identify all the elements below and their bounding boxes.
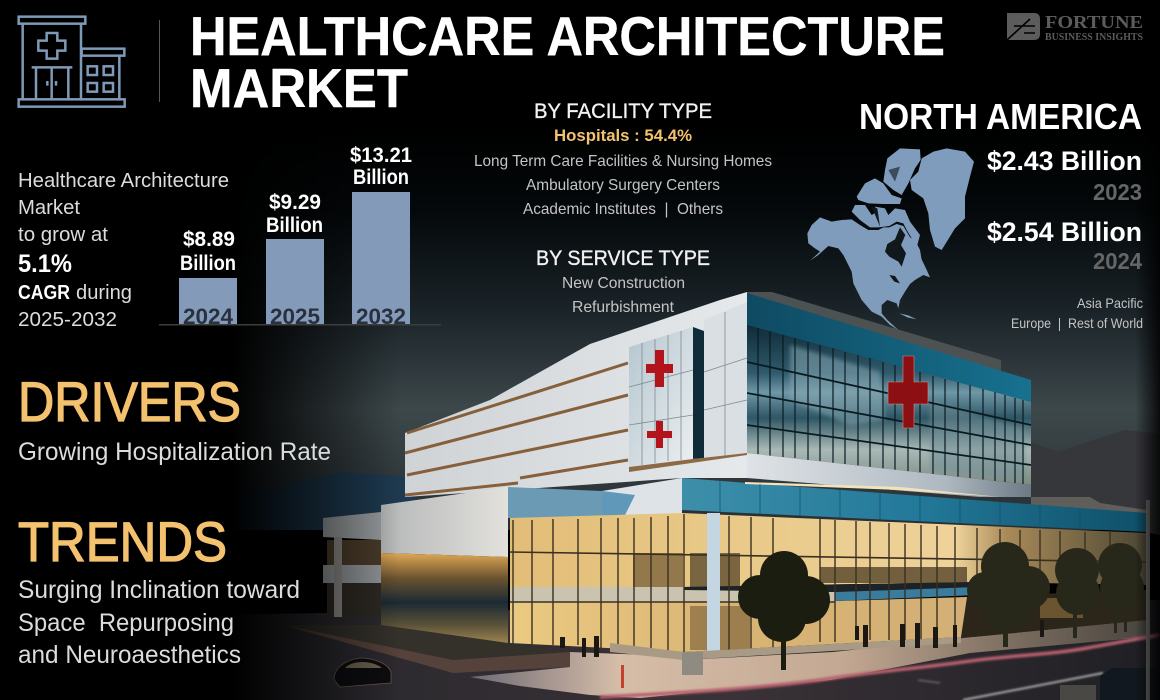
regional stats: Asia Pacific bbox=[1077, 295, 1143, 311]
left lower white box bbox=[381, 478, 682, 643]
bar 2032: 2032 bbox=[356, 304, 406, 329]
service type segment: New Construction bbox=[562, 275, 685, 292]
regional stats bbox=[859, 96, 1143, 331]
service type segment bbox=[536, 247, 710, 316]
dark soffit bbox=[684, 582, 980, 592]
bar 2024: $8.89 bbox=[183, 228, 235, 251]
bar 2025: $9.29 bbox=[269, 191, 321, 214]
regional stats: NORTH AMERICA bbox=[859, 96, 1142, 137]
bar 2025: 2025 bbox=[270, 304, 320, 329]
planter bbox=[283, 625, 570, 673]
road bbox=[200, 600, 1160, 700]
parked car bottom right bbox=[1060, 668, 1160, 700]
CAGR text block: Market bbox=[18, 197, 80, 219]
car bbox=[334, 658, 391, 687]
pavement bbox=[470, 620, 1147, 698]
CAGR text block bbox=[18, 170, 229, 331]
CAGR text block: to grow at bbox=[18, 224, 108, 246]
trends: TRENDS bbox=[18, 510, 227, 573]
bar 2032 bbox=[350, 144, 412, 329]
people on the pavement bbox=[560, 620, 1044, 657]
icon: small red crosses bbox=[646, 350, 673, 448]
storefront glazing bbox=[510, 513, 1147, 660]
divider bbox=[159, 20, 160, 102]
facility type segment: Hospitals : 54.4% bbox=[554, 127, 692, 145]
regional stats: 2024 bbox=[1093, 248, 1142, 274]
reflected clouds bbox=[790, 345, 885, 425]
title: MARKET bbox=[190, 57, 408, 119]
facility type segment: Long Term Care Facilities & Nursing Homes bbox=[474, 153, 772, 170]
CAGR text block: CAGR bbox=[18, 282, 70, 304]
regional stats: Europe | Rest of World bbox=[1011, 315, 1143, 331]
trends: and Neuroaesthetics bbox=[18, 641, 241, 669]
grey parapet beyond the band bbox=[1031, 497, 1147, 516]
trees bbox=[738, 542, 1144, 670]
title: HEALTHCARE ARCHITECTURE bbox=[190, 5, 945, 67]
Hudson Bay and Great Lakes cuts bbox=[872, 167, 906, 283]
upper glazing bbox=[747, 325, 1031, 485]
logo: Fortune Business Insights bbox=[1007, 12, 1143, 43]
trends bbox=[18, 510, 300, 669]
facility type segment: Academic Institutes | Others bbox=[523, 201, 723, 218]
street pole bbox=[1146, 500, 1150, 700]
service type segment: BY SERVICE TYPE bbox=[536, 247, 710, 270]
ground floor base bbox=[610, 637, 961, 660]
facility type segment: BY FACILITY TYPE bbox=[534, 100, 712, 123]
logo: Fortune Business Insights: BUSINESS INSIGHTS bbox=[1045, 32, 1143, 43]
bar 2025: Billion bbox=[266, 214, 323, 237]
light trails bbox=[600, 635, 1160, 700]
title bbox=[190, 5, 945, 119]
regional stats: $2.43 Billion bbox=[987, 146, 1142, 176]
trends: Space Repurposing bbox=[18, 609, 234, 637]
brown floor stripes bbox=[405, 363, 628, 495]
upper white floors bbox=[405, 292, 747, 497]
bar 2032: $13.21 bbox=[350, 144, 412, 167]
bar 2024: Billion bbox=[180, 252, 236, 275]
bar 2024: 2024 bbox=[183, 304, 234, 329]
left wing bbox=[323, 512, 381, 617]
drivers: Growing Hospitalization Rate bbox=[18, 438, 331, 466]
bar 2032: Billion bbox=[353, 166, 409, 189]
icon: big red cross bbox=[888, 356, 928, 428]
pillar block and bollard bbox=[621, 652, 703, 688]
CAGR text block: 2025-2032 bbox=[18, 309, 117, 331]
roof bbox=[747, 292, 1001, 372]
sky bbox=[200, 130, 1160, 530]
bar chart bbox=[159, 144, 441, 329]
facility type segment bbox=[474, 100, 772, 218]
regional stats: 2023 bbox=[1093, 179, 1142, 205]
trends: Surging Inclination toward bbox=[18, 576, 300, 604]
CAGR text block: during bbox=[76, 282, 132, 304]
icon: hospital building bbox=[19, 17, 125, 107]
CAGR text block: 5.1% bbox=[18, 250, 72, 278]
rear wall behind right-hand trees bbox=[960, 590, 1147, 637]
lower blue band bbox=[682, 478, 1147, 532]
dark fades bbox=[0, 0, 400, 700]
logo: Fortune Business Insights: FORTUNE bbox=[1045, 12, 1143, 32]
bar 2024 bbox=[179, 228, 237, 329]
tower panel bbox=[629, 302, 747, 472]
map: North America bbox=[807, 148, 974, 330]
drivers: DRIVERS bbox=[18, 370, 241, 433]
service type segment: Refurbishment bbox=[572, 299, 675, 316]
baseline bbox=[159, 324, 441, 326]
regional stats: $2.54 Billion bbox=[987, 217, 1142, 247]
CAGR text block: Healthcare Architecture bbox=[18, 170, 229, 192]
blue top band bbox=[747, 293, 1031, 402]
white band below glazing bbox=[747, 453, 1031, 497]
bar 2025 bbox=[266, 191, 324, 329]
mountains bbox=[230, 430, 1160, 535]
facility type segment: Ambulatory Surgery Centers bbox=[526, 177, 720, 194]
interior shading bbox=[633, 553, 683, 587]
white column bbox=[707, 513, 720, 652]
drivers bbox=[18, 370, 331, 466]
